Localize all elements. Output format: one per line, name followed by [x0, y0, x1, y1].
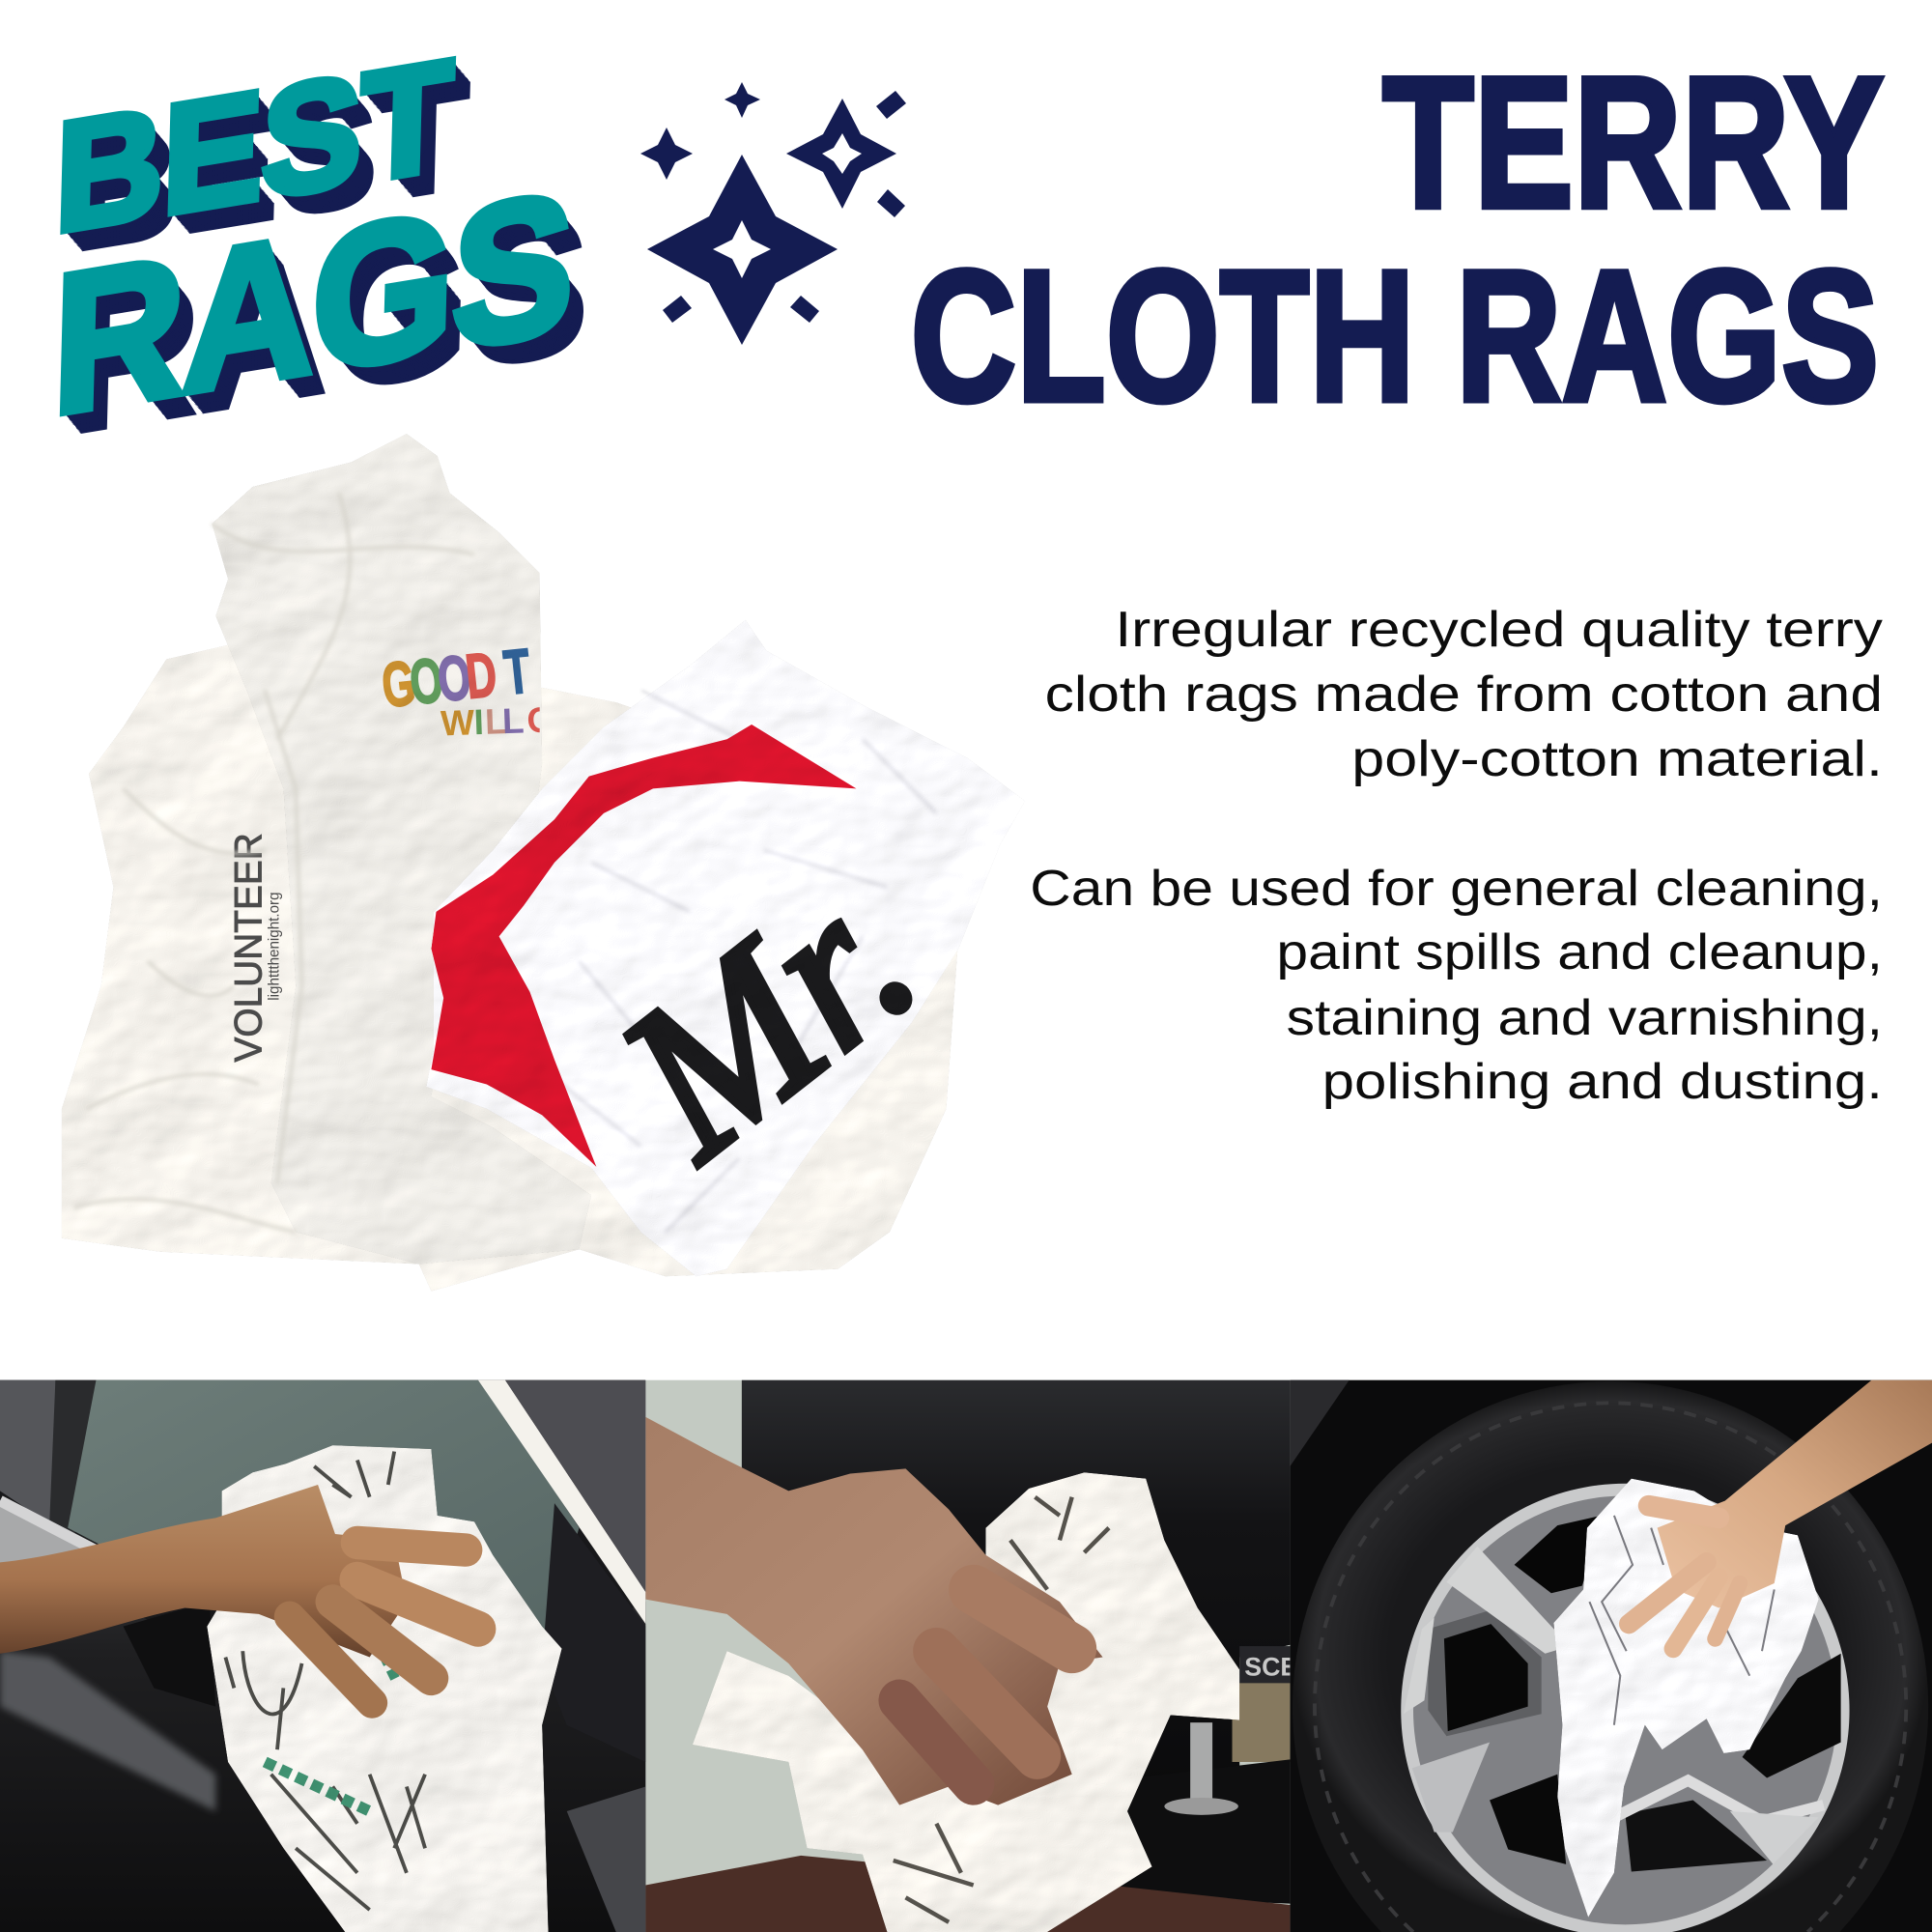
car sill [0, 1507, 80, 1563]
print: will: L [501, 700, 525, 741]
text: paragraph 1: Irregular recycled quality terry [1115, 602, 1884, 658]
hand and arm [0, 1485, 478, 1703]
arm and hand [1629, 1380, 1932, 1649]
title [911, 38, 1884, 441]
rag in hand [207, 1445, 562, 1932]
table [645, 1856, 1290, 1932]
rag print [225, 1452, 425, 1910]
rag: white cloth [426, 620, 1025, 1276]
logo word: best: BEST [53, 26, 454, 265]
text: paragraph 2: polishing and dusting. [1322, 1054, 1883, 1110]
text: paragraph 2: Can be used for general cleaning, [1030, 861, 1883, 917]
tire [1293, 1381, 1928, 1932]
print: good times: O [407, 644, 446, 718]
cloth creases [529, 690, 936, 1233]
stand [1190, 1722, 1212, 1804]
print: will: I [473, 702, 485, 742]
print: mr: Mr. [575, 830, 957, 1205]
rag: grey t-shirt [212, 434, 591, 1264]
icon: medium sparkle [786, 99, 896, 209]
monitor label: SCE [1244, 1653, 1297, 1682]
rim silver spokes [1446, 1547, 1570, 1654]
icon: large sparkle [647, 155, 838, 345]
icon: small left sparkle [640, 128, 693, 180]
rim [1401, 1484, 1850, 1932]
monitor label [1239, 1646, 1291, 1683]
print: will: L [484, 701, 507, 742]
print: website: lighttthenight.org [266, 892, 282, 1001]
photo panel: hand wiping [645, 1380, 1297, 1932]
fingers [357, 1543, 466, 1550]
car door highlight [0, 1651, 215, 1811]
photo: pile of rags [62, 434, 1025, 1292]
print: volunteer: VOLUNTEER [227, 833, 270, 1062]
text: paragraph 2: staining and varnishing, [1287, 990, 1883, 1046]
rag in hand [1553, 1479, 1819, 1918]
icon: small top sparkle [724, 82, 760, 118]
text: paragraph 2 [1030, 861, 1883, 1110]
shirt creases [74, 493, 474, 1233]
logo word: rags: RAGS [50, 150, 575, 457]
rag: red collar and panel [431, 724, 856, 1167]
icon: sparkles [640, 82, 906, 345]
stand base [1121, 1759, 1291, 1904]
text: paragraph 1: cloth rags made from cotton and [1045, 667, 1883, 723]
rag print [894, 1497, 1109, 1922]
text: paragraph 2: paint spills and cleanup, [1276, 924, 1883, 980]
wheel arch [1290, 1380, 1350, 1466]
car pillar right [505, 1380, 645, 1592]
print: good times: O [435, 641, 474, 715]
icon: diamonds [663, 91, 906, 323]
car chrome strip [0, 1495, 97, 1548]
print: will: C [526, 699, 554, 740]
rag print [1589, 1516, 1775, 1725]
hand and arm [645, 1417, 1103, 1805]
wall behind [1233, 1682, 1290, 1762]
print: good times: G [379, 647, 418, 721]
print: will [440, 707, 540, 736]
monitor [742, 1380, 1290, 1786]
print: will: W [440, 702, 475, 743]
text: paragraph 1 [1045, 602, 1884, 787]
text: paragraph 1: poly-cotton material. [1351, 731, 1883, 787]
rim windows [1515, 1515, 1606, 1593]
rag in hand [693, 1472, 1239, 1932]
car mirror [542, 1503, 645, 1762]
car pillar [0, 1380, 55, 1528]
fingers [974, 1589, 1072, 1649]
print: good times: T [500, 636, 534, 708]
text block: description [1030, 602, 1884, 1110]
rag: back cream shirt [62, 640, 958, 1292]
print: good times: D [463, 639, 500, 712]
logo: best rags [50, 26, 583, 457]
print: good times [383, 647, 540, 736]
photo panel: wiping wheel [1290, 1380, 1932, 1932]
car white strip [478, 1380, 645, 1624]
car lower panel [0, 1602, 645, 1932]
car window [68, 1380, 579, 1651]
photo panel: wiping car door [0, 1380, 645, 1932]
